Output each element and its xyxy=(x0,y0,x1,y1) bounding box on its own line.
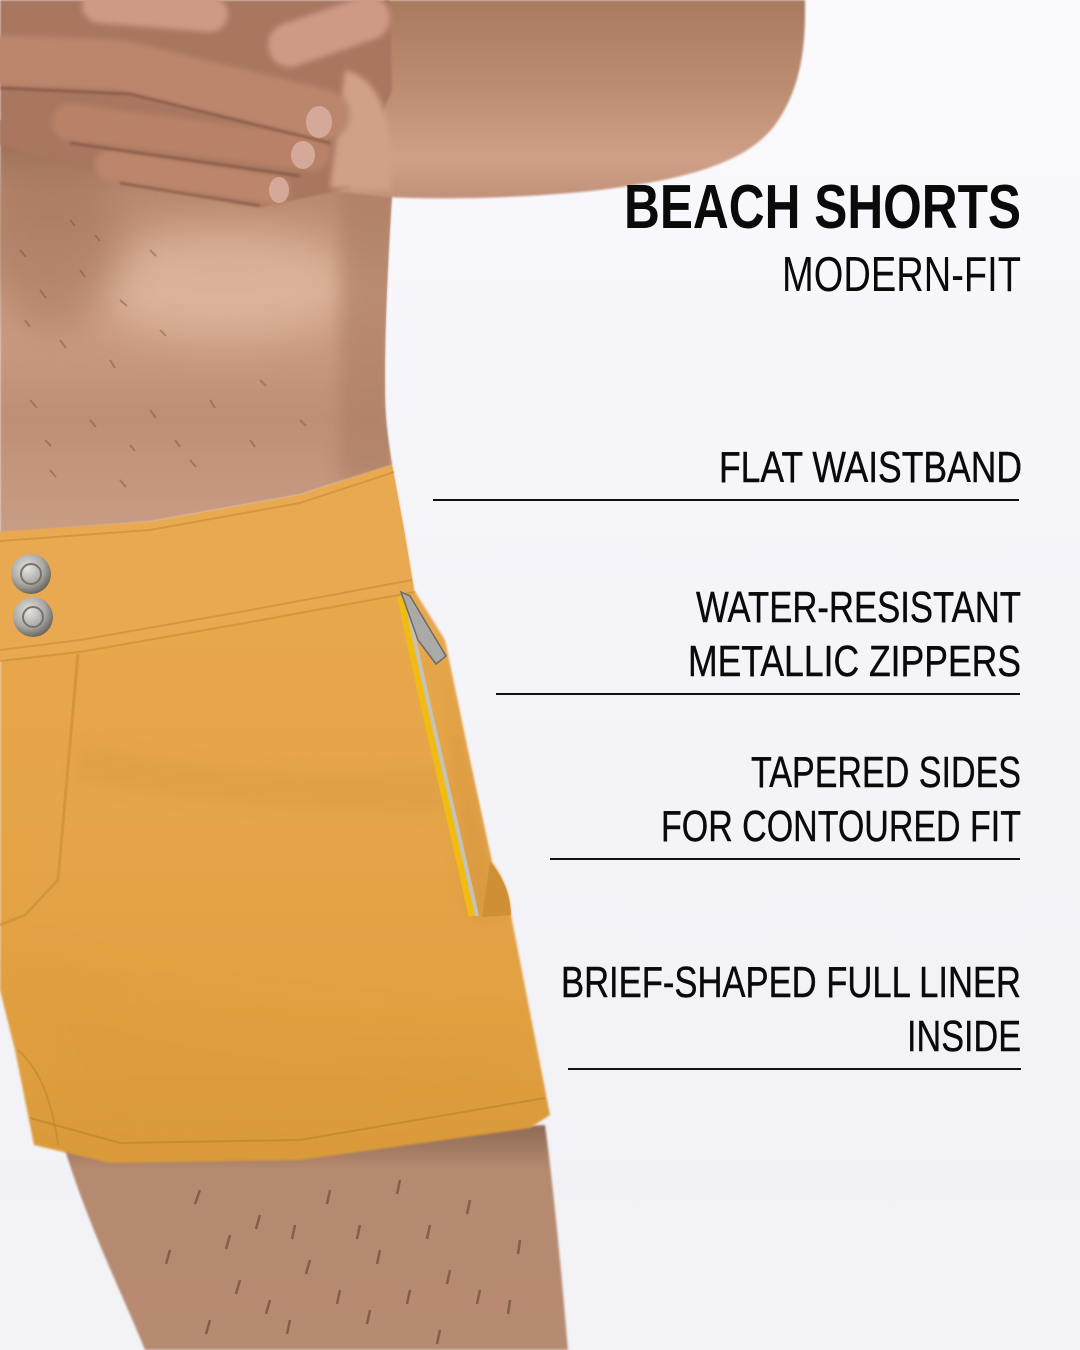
callout: tapered sides xyxy=(550,748,1021,859)
callout: water-resistant metallic zippers xyxy=(496,583,1021,694)
callout: brief-shaped full liner: INSIDE xyxy=(907,1012,1021,1061)
waistband xyxy=(0,465,414,660)
fly placket xyxy=(0,654,78,925)
callout: brief-shaped full liner xyxy=(561,958,1021,1069)
fabric shading xyxy=(0,640,540,1140)
photo: forearm xyxy=(300,0,805,198)
icon: snap buttons xyxy=(11,554,53,637)
photo: thigh xyxy=(65,1125,568,1350)
waistband seams xyxy=(0,472,415,661)
pocket edge xyxy=(482,862,511,917)
hem stitching xyxy=(30,1098,545,1143)
icon: metallic zipper xyxy=(401,592,477,916)
photo: torso xyxy=(0,120,400,534)
side seam xyxy=(18,1050,58,1145)
photo: yellow shorts xyxy=(0,465,550,1163)
photo: clasped hands xyxy=(0,0,392,207)
